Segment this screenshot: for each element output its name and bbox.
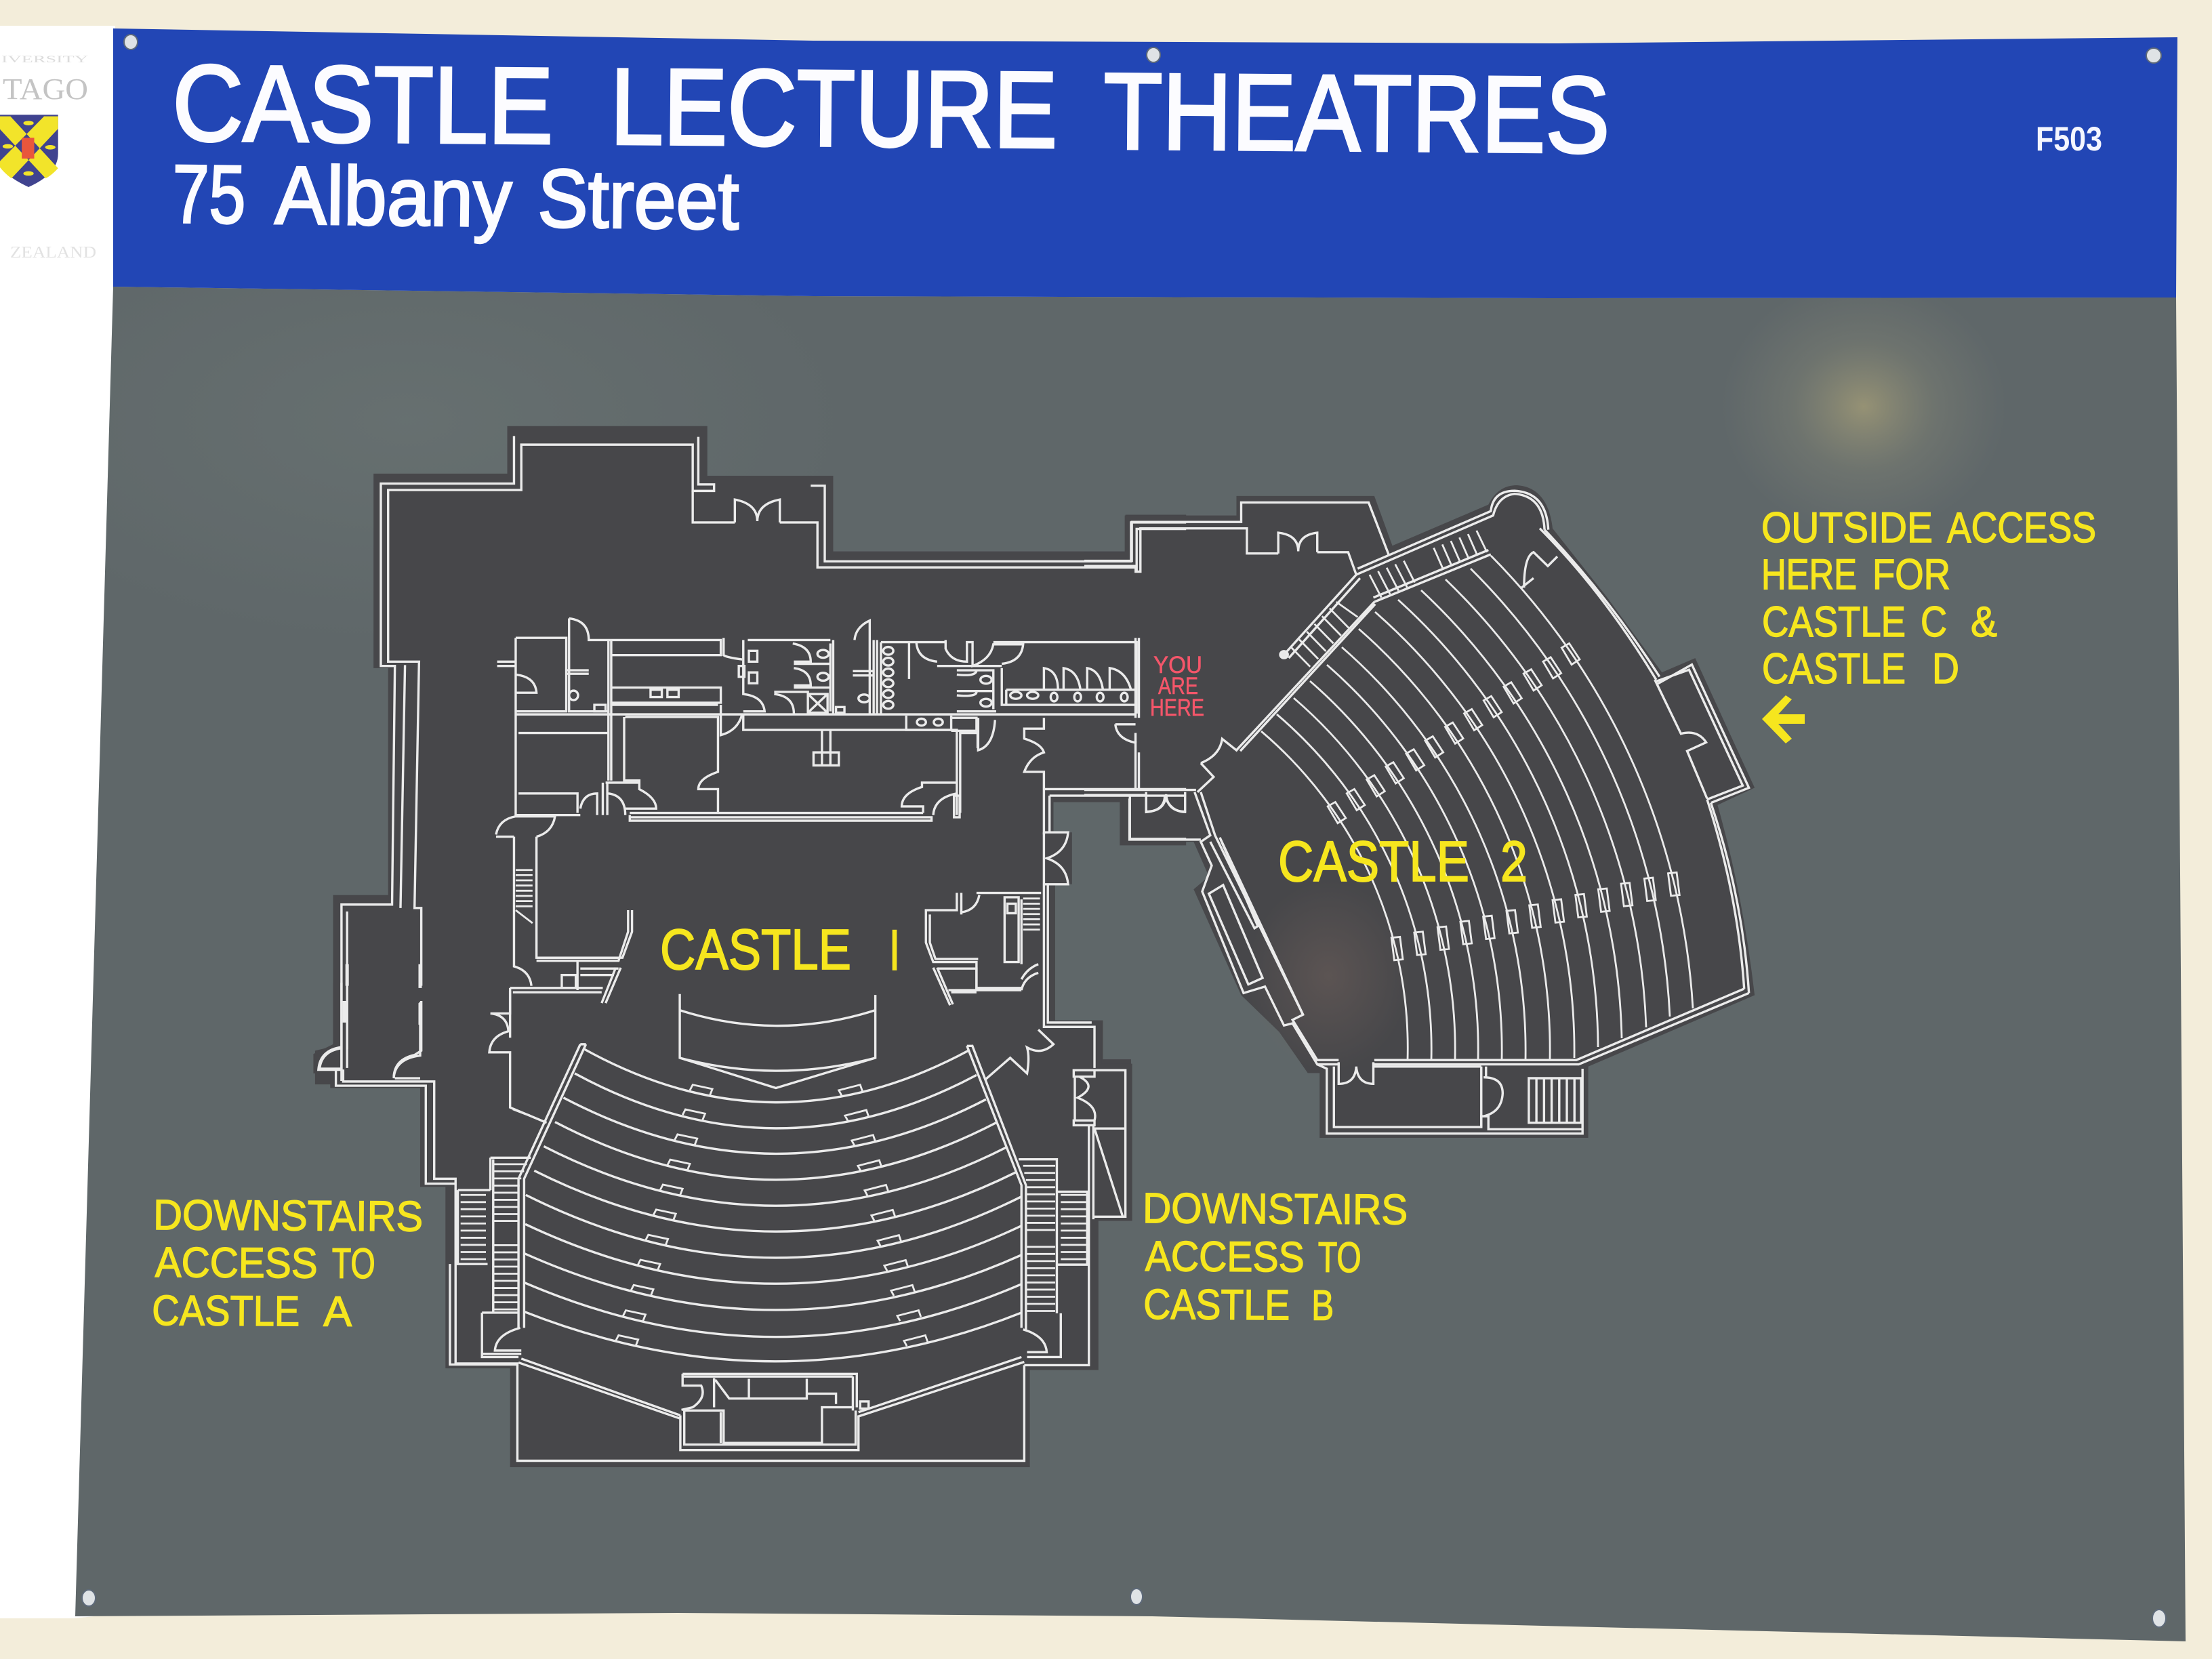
right annex and doors <box>985 1029 1126 1216</box>
label: outside access for Castle C and D: ACCESS <box>1947 504 2096 552</box>
logo text: IVERSITY <box>1 54 88 65</box>
label: Castle 1: CASTLE <box>660 918 851 981</box>
floor plan dark silhouette <box>313 426 1755 1467</box>
label: downstairs access to Castle A: CASTLE <box>152 1287 300 1335</box>
title: THEATRES <box>1103 50 1610 176</box>
floor plan: upper building walls and rooms <box>319 436 1186 1081</box>
label: downstairs access to Castle A: ACCESS <box>155 1239 318 1287</box>
label: downstairs access to Castle B <box>1142 1185 1408 1330</box>
label: you are here: YOU <box>1153 652 1202 678</box>
label: downstairs access to Castle B: DOWNSTAIRS <box>1143 1185 1408 1233</box>
bottom rooms and stair <box>1317 1062 1582 1134</box>
seating rows <box>524 1049 1021 1361</box>
left side wall and panels <box>1195 739 1338 1065</box>
label: downstairs access to Castle A: TO <box>332 1240 375 1288</box>
title <box>172 42 1610 176</box>
label: downstairs access to Castle A: DOWNSTAIRS <box>153 1191 423 1240</box>
label: outside access for Castle C and D: D <box>1932 645 1959 693</box>
glare on Castle 2 <box>1247 881 1410 1071</box>
outer curved wall and rear annex <box>1374 529 1749 1065</box>
label: you are here <box>1150 652 1204 721</box>
floor plan: Castle 2 seating <box>1261 556 1693 1060</box>
label: outside access for Castle C and D: CASTLE <box>1762 598 1906 646</box>
label: outside access for Castle C and D: CASTLE <box>1762 645 1906 693</box>
label: downstairs access to Castle B: CASTLE <box>1143 1281 1290 1329</box>
lectern desk <box>680 994 876 1088</box>
left stairs <box>450 1158 531 1364</box>
label: outside access for Castle C and D: FOR <box>1872 551 1950 598</box>
label: you are here: HERE <box>1150 695 1204 721</box>
floor plan: Castle 2 walls <box>1084 491 1749 1134</box>
panel: blue header band <box>113 28 2177 298</box>
subtitle: Albany <box>274 149 512 244</box>
subtitle <box>172 148 739 247</box>
logo text <box>1 54 96 262</box>
label: Castle 2: CASTLE <box>1278 830 1469 893</box>
label: outside access for Castle C and D <box>1761 504 2096 693</box>
label: outside access for Castle C and D: OUTSIDE <box>1761 504 1933 552</box>
aisle steps <box>616 1085 928 1347</box>
floor plan: Castle 1 auditorium <box>336 983 1126 1460</box>
label: outside access for Castle C and D: C <box>1921 598 1947 646</box>
vestibule <box>1084 790 1201 840</box>
title: CASTLE <box>172 42 554 167</box>
label: you are here: ARE <box>1158 673 1198 699</box>
left walls and lobby <box>336 983 547 1187</box>
aisle steps <box>1328 643 1679 960</box>
white paper strip with university logo <box>0 26 115 1618</box>
subtitle: Street <box>537 152 739 247</box>
title: LECTURE <box>610 45 1058 171</box>
panel: grey sign body <box>75 287 2186 1641</box>
icon: university shield <box>0 115 58 187</box>
arrow: pointing left <box>1762 695 1805 743</box>
label: downstairs access to Castle B: B <box>1311 1282 1334 1330</box>
right stairs <box>1019 1125 1093 1365</box>
label: Castle 2: 2 <box>1500 830 1528 893</box>
label: Castle 1: I <box>889 918 900 982</box>
glare reflections on the sign <box>380 315 1965 499</box>
front stage <box>517 1357 1024 1460</box>
sign code: F503 <box>2036 120 2102 158</box>
subtitle: 75 <box>172 148 246 241</box>
label: downstairs access to Castle B: ACCESS <box>1145 1233 1305 1281</box>
foyer walls <box>1084 502 1389 575</box>
diagonal access corridor <box>1236 491 1549 751</box>
seating rows <box>1261 556 1693 1060</box>
label: downstairs access to Castle A <box>152 1191 423 1336</box>
label: downstairs access to Castle A: A <box>323 1288 352 1336</box>
label: downstairs access to Castle B: TO <box>1317 1234 1361 1282</box>
logo text: ZEALAND <box>10 244 96 262</box>
label: outside access for Castle C and D: HERE <box>1761 551 1857 598</box>
label: outside access for Castle C and D: & <box>1971 598 1997 646</box>
logo text: TAGO <box>3 73 88 106</box>
side walls <box>518 1044 1026 1330</box>
